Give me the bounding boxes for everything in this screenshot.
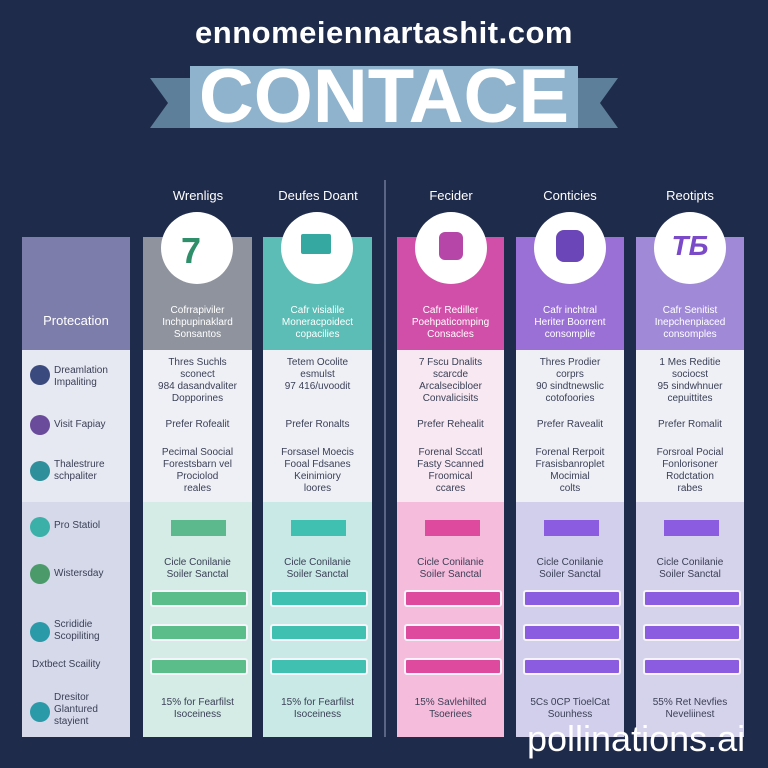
panel: column 4: 5Cs 0CP TioelCat [530,697,610,708]
panel: column 4: consomplie [545,329,595,340]
panel: column 2: 97 416/uvoodit [285,381,350,392]
panel: column 5: 95 sindwhnuer [657,381,723,392]
panel: column 1: reales [184,483,211,494]
panel: column 2: Cicle Conilanie [284,557,351,568]
panel: row labels: Pro Statiol [54,520,100,531]
panel: column 4: Mocimial [550,471,590,482]
icon [281,212,353,284]
panel: column 3: Fasty Scanned [417,459,484,470]
panel: column 5: Rodctation [666,471,714,482]
panel: row labels: Visit Fapiay [54,419,106,430]
site url heading: ennomeiennartashit.com [195,15,573,50]
text: Fecider [429,188,473,203]
panel: column 5: rabes [677,483,702,494]
panel: column 2: Keinimiory [294,471,341,482]
panel: column 2: Tetem Ocolite [287,357,348,368]
panel: column 5: Neveliinest [666,709,714,720]
panel: column 4: Prefer Ravealit [537,419,603,430]
panel: column 1: Cofrrapiviler [171,305,224,316]
panel: column 1: Isoceiness [174,709,221,720]
watermark: pollinations.ai [527,718,745,759]
panel: column 5: Cafr Senitist [663,305,717,316]
panel: column 3: ccares [436,483,465,494]
panel: column 1: Prefer Rofealit [166,419,229,430]
panel: column 4: corprs [556,369,584,380]
panel: row labels: Dresitor [54,692,89,703]
panel: column 2: Cafr visialile [291,305,344,316]
divider [384,180,386,737]
panel: column 1: 984 dasandvaliter [158,381,237,392]
panel: column 5: Prefer Romalit [658,419,722,430]
panel: column 2 [263,212,372,737]
panel: column 2: Isoceiness [294,709,341,720]
text: Deufes Doant [278,188,358,203]
icon: TБ [672,230,708,261]
panel: column 1 [143,212,252,737]
panel: column 3: Cicle Conilanie [417,557,484,568]
panel: column 5: Inepchenpiaced [655,317,725,328]
panel: column 4: Forenal Rerpoit [536,447,604,458]
panel: column 4: colts [560,483,580,494]
panel: column 3: Convalicisits [423,393,478,404]
panel: column 3: Prefer Rehealit [417,419,484,430]
panel: column 4: 90 sindtnewslic [536,381,604,392]
panel: column 1: Prociolod [177,471,218,482]
panel: column 3: scarcde [433,369,468,380]
text: Conticies [543,188,597,203]
panel: row labels: Wistersday [54,568,103,579]
panel: column 5: sociocst [672,369,708,380]
panel: row labels: Protecation [43,313,109,328]
panel: column 3: 15% Savlehilted [415,697,486,708]
panel: column 1: Thres Suchls [168,357,227,368]
panel: column 5: cepuittites [667,393,713,404]
panel: column 4: Cafr inchtral [543,305,597,316]
panel: column 1: Sonsantos [174,329,221,340]
panel: row labels: Dreamlation [54,365,108,376]
panel: column 2: Soiler Sanctal [287,569,348,580]
panel: column 5: Soiler Sanctal [659,569,721,580]
panel: column 3: Tsoeriees [429,709,472,720]
panel: column 2: Prefer Ronalts [286,419,349,430]
panel: column 4: Cicle Conilanie [537,557,603,568]
panel: column 5: 1 Mes Reditie [659,357,721,368]
panel: column 1: Cicle Conilanie [164,557,231,568]
panel: column 1: Soiler Sanctal [167,569,228,580]
title banner [150,54,618,139]
panel: column 1: Forestsbarn vel [163,459,232,470]
panel: column 1: Inchpupinaklard [162,317,233,328]
panel: column 3 [397,212,504,737]
panel: column 4 [516,212,624,737]
panel: column 2: Moneracpoidect [282,317,353,328]
column headings: Wrenligs [173,188,223,203]
panel: row labels: Scrididie [54,619,92,630]
panel: row labels: Glantured [54,704,98,715]
panel: row labels: Thalestrure [54,459,105,470]
panel: column 4: Soiler Sanctal [539,569,601,580]
panel: column 4: cotofoories [546,393,594,404]
panel: column 2: Forsasel Moecis [281,447,354,458]
panel: column 1: Dopporines [172,393,223,404]
panel: row labels: stayient [54,716,88,727]
panel: column 2: copacilies [296,329,339,340]
panel: column 2: esmulst [300,369,335,380]
panel: column 2: Fooal Fdsanes [284,459,351,470]
panel: column 4: Thres Prodier [540,357,600,368]
icon [415,212,487,284]
panel: column 5: Fonlorisoner [662,459,718,470]
panel: column 1: Pecimal Soocial [162,447,233,458]
panel: column 2: 15% for Fearfilst [281,697,354,708]
panel: column 3: Poehpaticomping [412,317,489,328]
icon [161,212,233,284]
panel: column 5: Cicle Conilanie [657,557,723,568]
icon [534,212,606,284]
panel: column 3: 7 Fscu Dnalits [419,357,482,368]
panel: column 4: Frasisbanroplet [536,459,604,470]
panel: column 3: Forenal Sccatl [419,447,482,458]
panel: row labels: schpaliter [54,471,97,482]
panel: column 1: 15% for Fearfilst [161,697,234,708]
panel: row labels: Scopiliting [54,631,100,642]
panel: column 1: sconect [180,369,215,380]
icon: 7 [181,230,201,271]
panel: row labels: Dxtbect Scaility [32,659,100,670]
panel: column 3: Arcalsecibloer [419,381,482,392]
panel: column 3: Cafr Rediller [423,305,478,316]
panel: row labels [22,237,130,737]
panel: column 5: Forsroal Pocial [657,447,723,458]
panel: column 3: Froomical [429,471,472,482]
panel: column 5: 55% Ret Nevfies [653,697,727,708]
panel: column 3: Soiler Sanctal [420,569,481,580]
panel: column 2: loores [304,483,331,494]
panel: column 5 [636,212,744,737]
icon [654,212,726,284]
panel: column 4: Sounhess [548,709,592,720]
panel: row labels: Impaliting [54,377,97,388]
title text: CONTACE [199,54,569,139]
panel: column 5: consomples [663,329,717,340]
panel: column 3: Consacles [427,329,474,340]
text: Reotipts [666,188,714,203]
panel: column 4: Heriter Boorrent [534,317,606,328]
